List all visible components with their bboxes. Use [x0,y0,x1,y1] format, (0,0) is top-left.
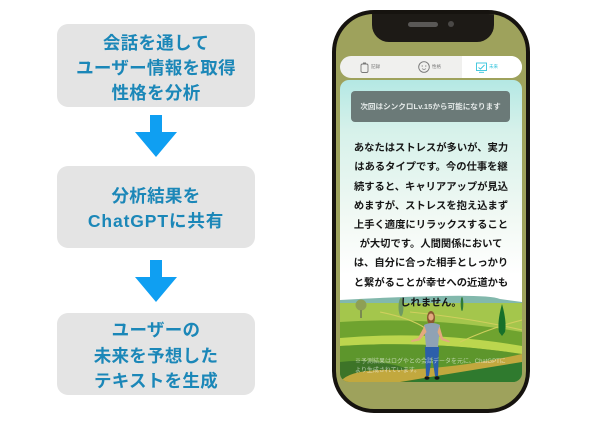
arrow: down 2 [135,260,177,302]
prediction text: めますが、ストレスを抱え込まず [354,201,508,212]
prediction text: 続すると、キャリアアップが見込 [354,182,508,193]
prediction text: あなたはストレスが多いが、実力 [354,143,508,154]
disclaimer [355,357,506,374]
disclaimer: より生成されています。 [355,368,420,374]
tab bar [340,56,522,78]
flow box: generate [57,313,255,395]
tab: personality [418,61,441,73]
flow box: analyse [57,24,255,107]
notice box [351,91,510,122]
phone mockup [332,10,530,413]
prediction text: しれません。 [400,298,462,309]
flow box: generate: ユーザーの [112,320,200,340]
flow box: analyse: 性格を分析 [112,83,200,103]
landscape illustration [340,296,522,382]
prediction text: 上手く適度にリラックスすること [354,220,508,231]
phone notch [372,10,494,42]
arrow: down 1 [135,115,177,157]
flow box: share [57,166,255,248]
prediction text: と繋がることが幸せへの近道かも [354,278,508,289]
flow box: generate: 未来を予想した [94,346,218,366]
tab: record: 記録 [371,64,380,69]
flow box: analyse: ユーザー情報を取得 [76,58,236,78]
flow box: analyse: 会話を通して [103,33,209,53]
flow box: generate: テキストを生成 [94,371,218,391]
tab: personality: 性格 [432,64,441,69]
content panel [340,80,522,382]
tab: record [360,62,380,73]
notice box: 次回はシンクロLv.15から可能になります [360,102,501,111]
prediction text: はあるタイプです。今の仕事を継 [354,162,508,173]
person [411,311,450,380]
flow box: share: 分析結果を [112,186,200,206]
prediction text [354,142,508,309]
tab: future [476,62,498,73]
prediction text: は、自分に合った相手としっかり [354,258,508,269]
prediction text: が大切です。人間関係において [360,239,502,250]
trees [356,297,506,336]
disclaimer: ※予測結果はログやとの会話データを元に、ChatGPTに [355,359,506,365]
tab: future: 未来 [489,64,498,69]
flow box: share: ChatGPTに共有 [88,211,224,231]
active tab background [462,56,522,78]
